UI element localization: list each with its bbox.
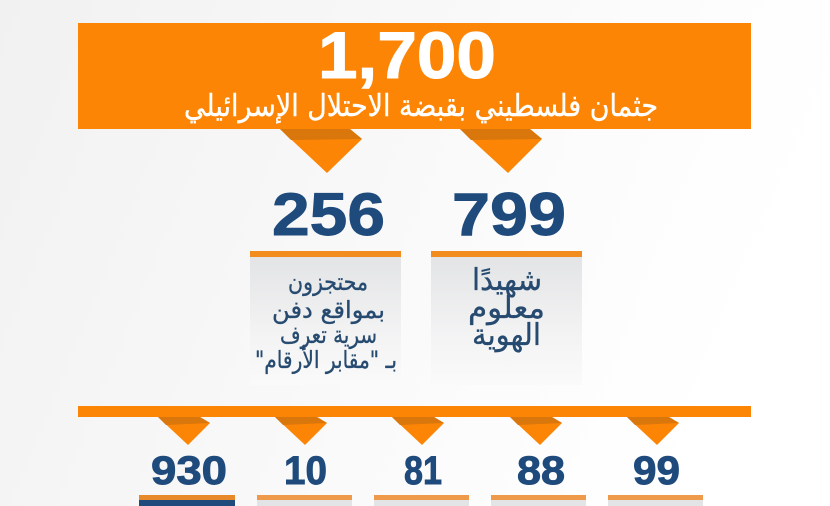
panel: burial sites bbox=[250, 251, 401, 385]
column 930 bbox=[139, 417, 235, 506]
column 10 bbox=[257, 417, 352, 506]
burial sites text: محتجزون bbox=[288, 268, 368, 296]
banner number: 1,700 bbox=[318, 18, 496, 92]
panel: identified martyrs bbox=[431, 251, 582, 385]
column 99: 99 bbox=[633, 449, 680, 493]
number 256: 256 bbox=[272, 181, 385, 248]
burial sites text: بـ "مقابر الأرقام" bbox=[255, 345, 397, 374]
burial sites text: سرية تعرف bbox=[280, 321, 377, 349]
divider bar bbox=[78, 406, 751, 417]
arrow: to 799 bbox=[460, 129, 542, 173]
identified martyrs text bbox=[468, 263, 545, 353]
column 88 bbox=[491, 417, 586, 506]
burial sites text bbox=[255, 268, 397, 374]
column 930: 930 bbox=[151, 449, 227, 493]
identified martyrs text: الهوية bbox=[472, 318, 541, 353]
arrow: to 256 bbox=[280, 129, 362, 173]
number 799: 799 bbox=[452, 181, 566, 248]
banner subtitle: جثمان فلسطيني بقبضة الاحتلال الإسرائيلي bbox=[184, 89, 658, 124]
column 81 bbox=[374, 417, 469, 506]
identified martyrs text: معلوم bbox=[468, 291, 545, 326]
identified martyrs text: شهيدًا bbox=[472, 263, 542, 298]
column 10: 10 bbox=[284, 449, 327, 493]
column 99 bbox=[608, 417, 703, 506]
column 81: 81 bbox=[404, 449, 442, 493]
column 88: 88 bbox=[517, 449, 565, 493]
banner bbox=[78, 18, 751, 129]
burial sites text: بمواقع دفن bbox=[272, 296, 385, 324]
